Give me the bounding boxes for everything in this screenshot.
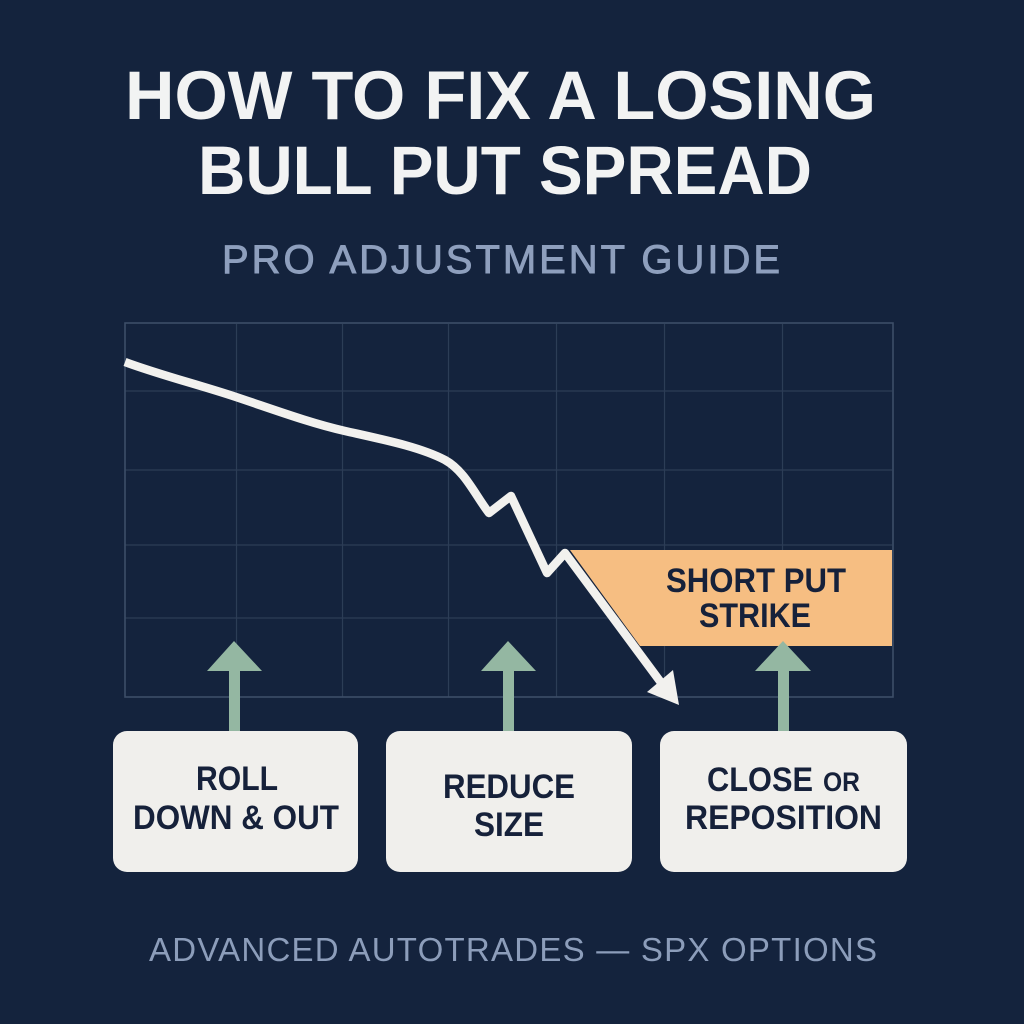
box: roll down and out: DOWN & OUT xyxy=(133,799,339,837)
box: close or reposition: OR xyxy=(823,767,860,797)
title: BULL PUT SPREAD xyxy=(198,132,812,209)
subtitle: PRO ADJUSTMENT GUIDE xyxy=(222,238,780,282)
box: reduce size: REDUCE xyxy=(443,768,575,806)
box: reduce size: SIZE xyxy=(474,806,544,844)
arrow: close or reposition xyxy=(755,641,811,732)
short put strike zone: STRIKE xyxy=(699,597,811,635)
box: close or reposition: REPOSITION xyxy=(685,799,882,837)
short put strike zone xyxy=(570,550,892,646)
title: HOW TO FIX A LOSING xyxy=(125,57,876,134)
box: roll down and out: ROLL xyxy=(196,760,278,798)
arrow: reduce size xyxy=(481,641,536,732)
short put strike zone: SHORT PUT xyxy=(666,562,846,600)
footer: ADVANCED AUTOTRADES — SPX OPTIONS xyxy=(149,931,877,968)
box: reduce size xyxy=(386,731,632,872)
box: close or reposition: CLOSE xyxy=(707,761,813,799)
price line with arrow xyxy=(125,362,679,705)
arrow: roll down and out xyxy=(207,641,262,732)
chart: price falling through short put strike xyxy=(125,323,893,705)
box: close or reposition xyxy=(660,731,907,872)
box: roll down and out xyxy=(113,731,358,872)
title xyxy=(125,57,876,209)
